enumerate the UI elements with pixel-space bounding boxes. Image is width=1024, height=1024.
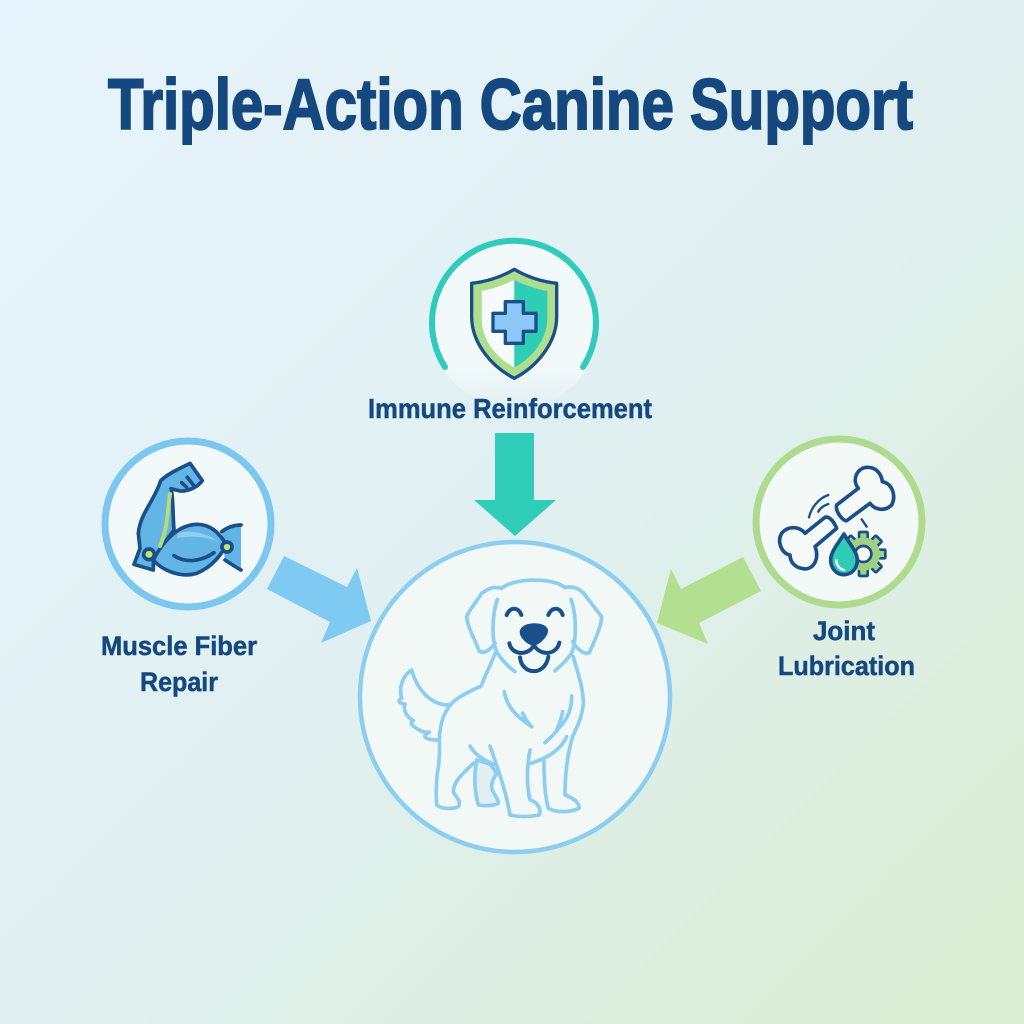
node: immune reinforcement	[368, 241, 652, 424]
icon ring: muscle	[105, 441, 271, 607]
icon ring: joints	[756, 439, 922, 605]
arrow: from left	[267, 556, 371, 643]
arrow: down	[474, 433, 556, 536]
arrow: from right	[657, 557, 761, 644]
label: muscle fiber repair	[101, 631, 257, 697]
central circle with dog	[360, 542, 670, 852]
label: joint lubrication: Joint	[813, 616, 875, 646]
label: joint lubrication	[778, 616, 915, 681]
progress arc	[432, 241, 596, 367]
icon: happy dog	[399, 580, 602, 817]
icon: flexed arm	[134, 463, 241, 575]
label: muscle fiber repair: Muscle Fiber	[101, 631, 257, 661]
icon: bones, drop and gear	[780, 467, 894, 576]
node: muscle fiber repair	[101, 441, 271, 697]
node: joint lubrication	[756, 439, 922, 681]
label: immune reinforcement: Immune Reinforcement	[368, 393, 652, 424]
icon: shield	[472, 269, 557, 378]
label: muscle fiber repair: Repair	[140, 667, 218, 697]
label: joint lubrication: Lubrication	[778, 651, 915, 681]
